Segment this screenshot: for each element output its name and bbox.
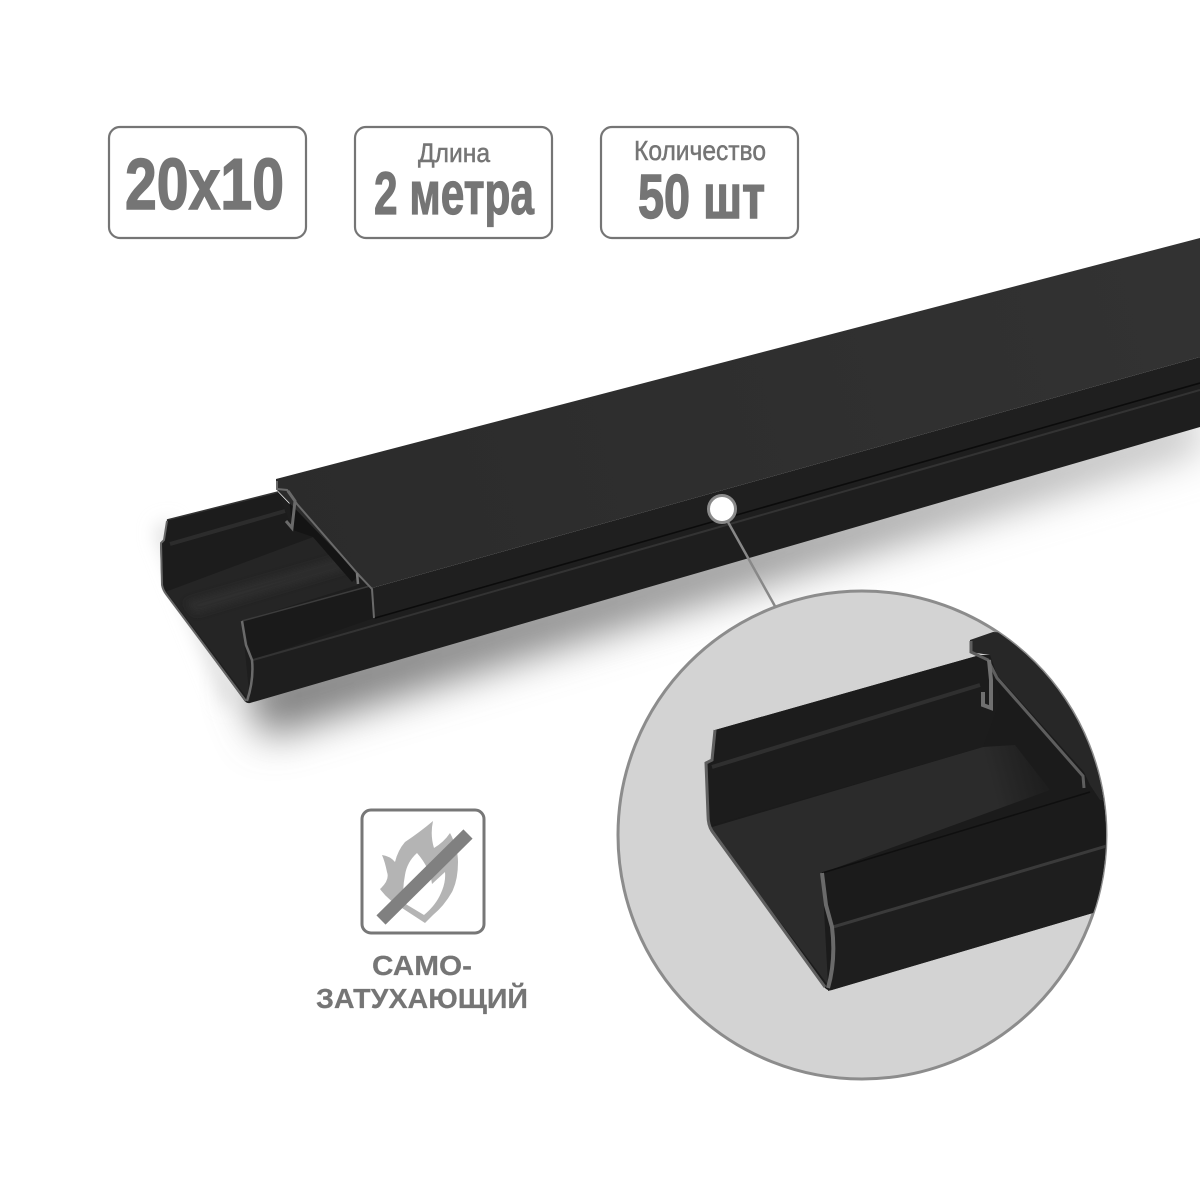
label: self-extinguishing <box>316 950 528 1014</box>
badge: size 20x10 <box>109 127 306 238</box>
channel cover <box>276 238 1200 618</box>
badge: size 20x10: 20x10 <box>125 145 284 225</box>
icon: crossing bar <box>381 834 468 920</box>
label: self-extinguishing: САМО- <box>372 950 472 981</box>
infographic canvas <box>108 126 1200 1080</box>
badge: quantity 50 pcs: 50 шт <box>638 163 765 232</box>
zoomed detail circle <box>618 591 1130 1079</box>
badge: length 2 metres: Длина <box>418 138 491 168</box>
product shadow <box>155 410 1200 738</box>
channel base <box>160 383 1200 703</box>
callout connector line and dot <box>708 496 776 608</box>
label: self-extinguishing: ЗАТУХАЮЩИЙ <box>316 982 528 1014</box>
icon: flame <box>380 821 458 923</box>
badge: quantity 50 pcs: Количество <box>634 135 766 166</box>
cable channel product <box>160 238 1200 703</box>
badge: length 2 metres: 2 метра <box>374 160 534 227</box>
badge: quantity 50 pcs <box>601 127 798 238</box>
zoomed channel end <box>705 632 1130 991</box>
badge: length 2 metres <box>355 127 552 238</box>
icon: self-extinguishing flame crossed out <box>362 810 484 933</box>
